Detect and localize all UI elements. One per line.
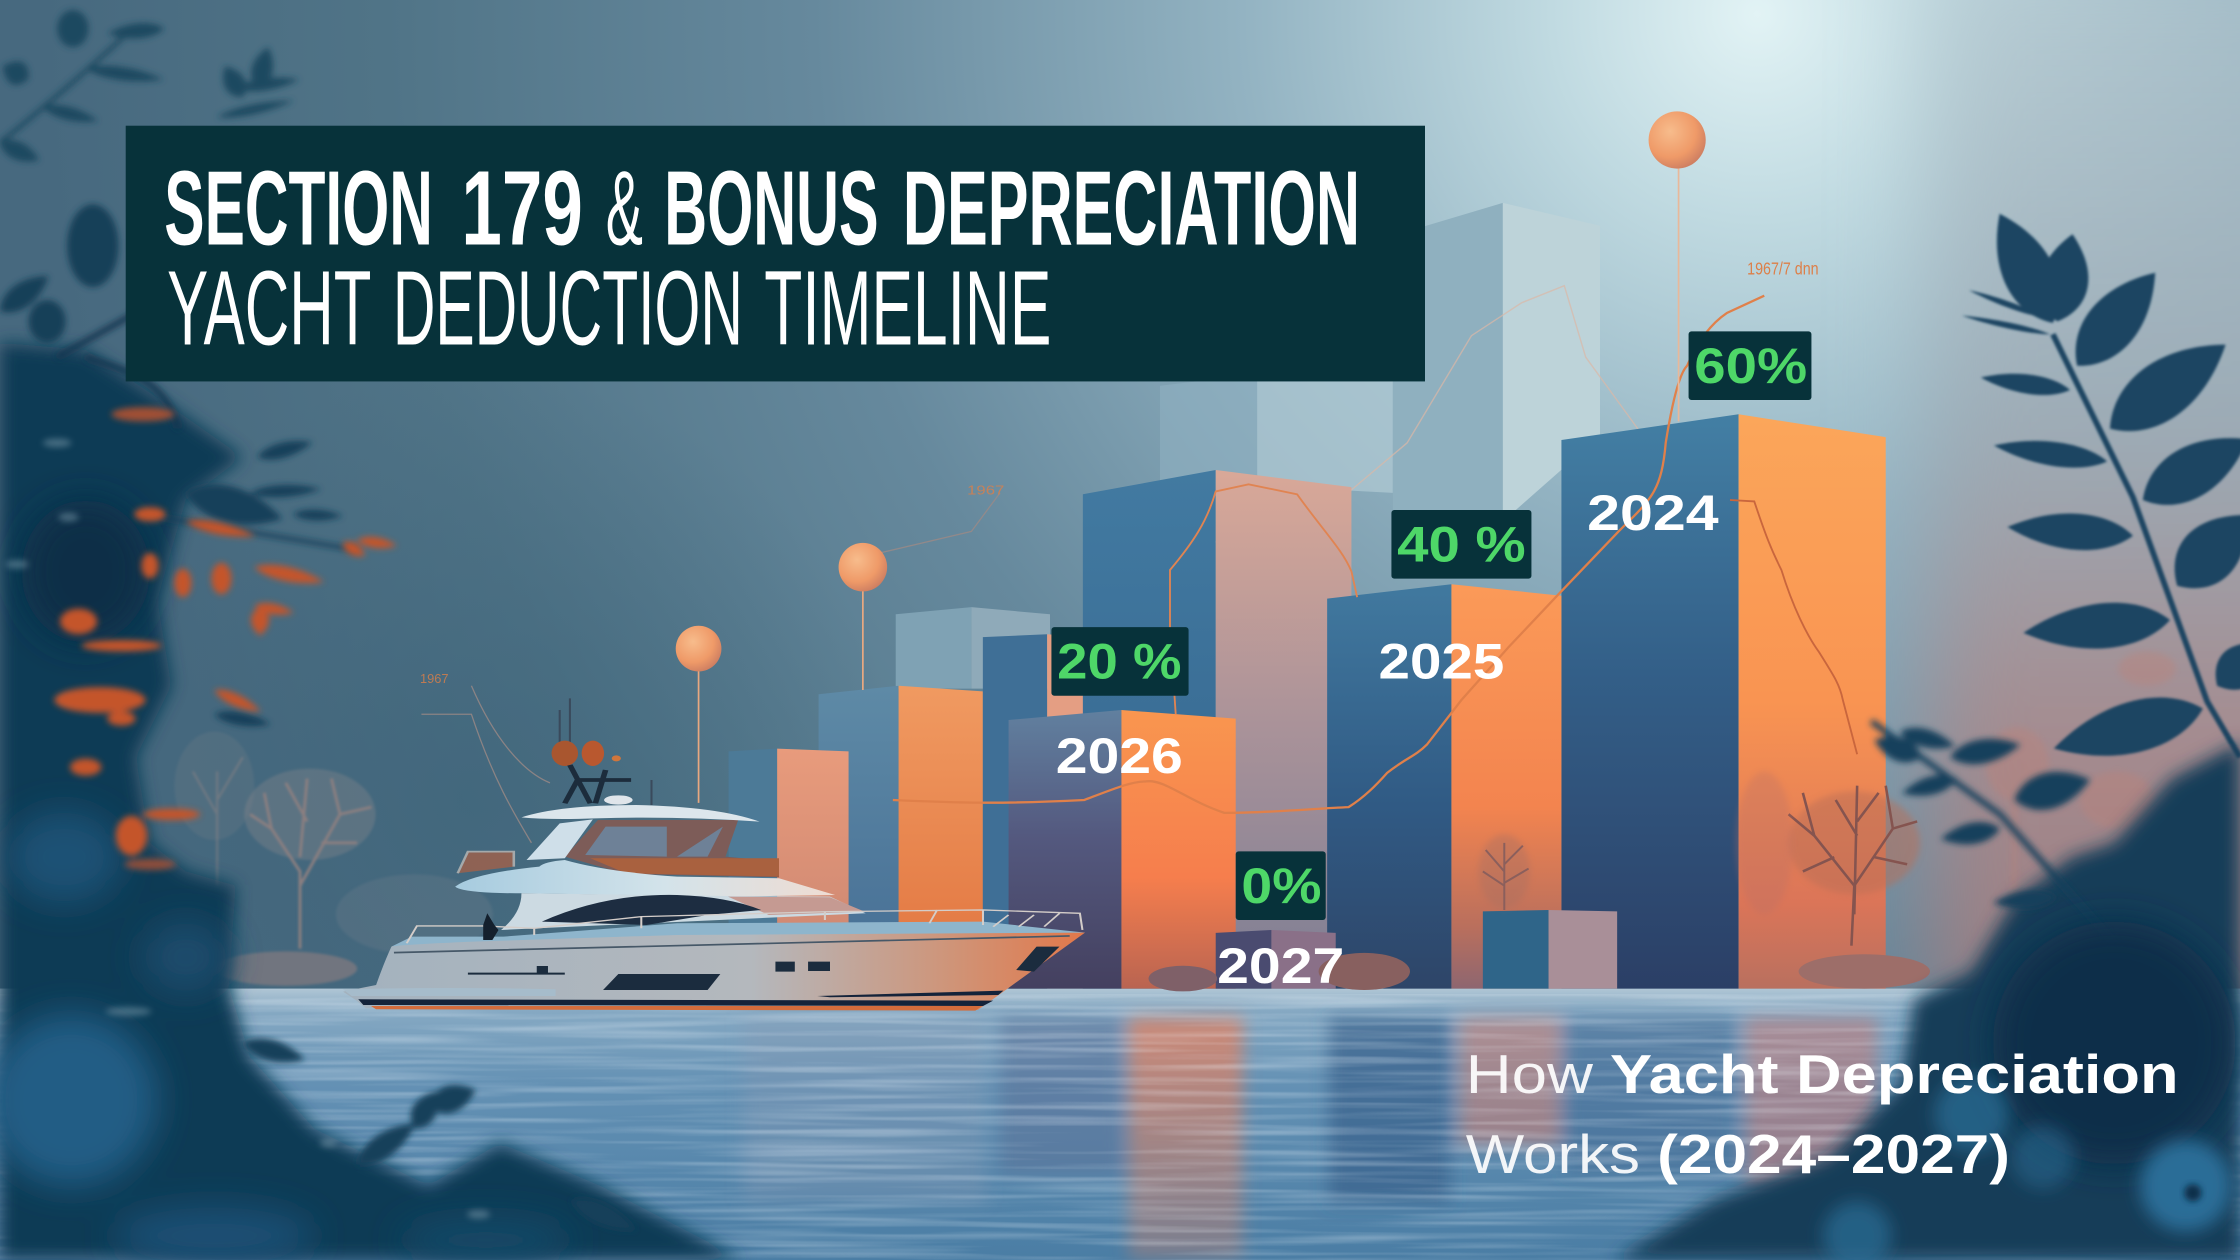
- small annotation labels: 1967: [420, 671, 449, 686]
- pale flecks in foliage: [6, 439, 490, 1219]
- bar: back-left tall: [819, 686, 983, 989]
- lower orange boot: [371, 1006, 982, 1011]
- title line 1: &: [606, 149, 643, 267]
- year: 2024: 2024: [1587, 485, 1719, 541]
- background right haze: [1929, 0, 2240, 1029]
- badge: 40 %: [1391, 510, 1531, 579]
- data line: back bar arc: [1170, 484, 1357, 714]
- year: 2027: 2027: [1217, 938, 1344, 994]
- crisp leaves with stem: [1961, 203, 2240, 773]
- leaves top-left: [0, 10, 300, 429]
- yacht: [343, 698, 1085, 1011]
- main cabin: [501, 893, 866, 930]
- title panel: [126, 126, 1425, 381]
- dark foliage mass: [0, 343, 743, 1260]
- aft rail: [458, 852, 514, 873]
- badge: 0%: 0%: [1241, 858, 1321, 914]
- small annotation labels: 1967: [967, 482, 1004, 497]
- bar: back-left small: [729, 749, 849, 989]
- badge: 20 %: 20 %: [1057, 634, 1181, 690]
- pale background towers: [896, 203, 1600, 689]
- subtitle line 1: [1466, 1044, 2179, 1105]
- cabin window: [542, 895, 761, 925]
- background dim left: [0, 343, 1000, 1000]
- water surface: [0, 989, 2240, 1260]
- small annotation labels: [420, 258, 1819, 686]
- lower dark foliage mass: [1614, 743, 2240, 1260]
- waterline stripe: [358, 991, 1003, 1006]
- side rail line: [394, 936, 1070, 953]
- bar: 2026: [1009, 710, 1236, 989]
- title line 2: DEDUCTION: [393, 249, 743, 367]
- background tree left: [174, 731, 493, 986]
- dark core: [1993, 921, 2236, 1164]
- year: 2026: 2026: [1056, 728, 1183, 784]
- mid deck: [455, 860, 835, 897]
- title line 1: DEPRECIATION: [903, 149, 1360, 267]
- hull body: [343, 933, 1085, 1010]
- water reflections: [743, 1017, 1877, 1260]
- subtitle line 2: [1466, 1124, 2010, 1185]
- rub rail: [343, 988, 556, 996]
- flower center: [2184, 1184, 2201, 1201]
- bar: 2024: [1561, 414, 1886, 989]
- water ripples: [0, 994, 2240, 1260]
- small cube next to 2025: [1483, 910, 1617, 989]
- blue lower foliage: [0, 500, 571, 1260]
- small line left: [421, 493, 1000, 843]
- faint pink background trees: [1986, 651, 2176, 929]
- hull windows: [468, 947, 1059, 990]
- data line: main orange curve: [893, 296, 1764, 813]
- title line 1: SECTION: [164, 149, 433, 267]
- subtitle line 2: Works: [1466, 1124, 1640, 1185]
- badge: 0%: [1236, 851, 1326, 920]
- main deck: [391, 922, 1085, 947]
- subtitle line 2: (2024–2027): [1657, 1124, 2010, 1185]
- thin pale data lines behind bars: [1171, 286, 1664, 571]
- crew figure: [483, 913, 499, 940]
- balloon left: [676, 626, 721, 803]
- trees and bushes around bars: [1149, 771, 1930, 991]
- bar: behind 2026 label: [983, 634, 1111, 989]
- year: 2025: 2025: [1379, 634, 1504, 690]
- title line 2: YACHT: [167, 249, 371, 367]
- badge: 20 %: [1051, 627, 1189, 696]
- flybridge glazing: [565, 820, 779, 877]
- bar: tall back center: [1083, 470, 1351, 989]
- mast and radar: [552, 698, 652, 805]
- bar: 2025: [1327, 584, 1561, 989]
- hardtop support: [527, 819, 593, 860]
- orange leaves: [54, 407, 398, 870]
- subtitle line 1: How: [1466, 1044, 1594, 1105]
- title line 1: 179: [461, 149, 583, 267]
- balloon top: [1649, 111, 1706, 421]
- blue flowers: [1823, 1077, 2231, 1260]
- badge: 40 %: 40 %: [1397, 516, 1526, 572]
- data line: 2024 bar descent: [1730, 500, 1857, 754]
- small annotation labels: 1967/7 dnn: [1747, 258, 1819, 278]
- subtitle line 1: Yacht Depreciation: [1610, 1044, 2179, 1105]
- balloon middle: [839, 543, 887, 690]
- hardtop: [521, 805, 760, 822]
- badge: 60%: 60%: [1694, 338, 1807, 394]
- badge: 60%: [1689, 331, 1811, 400]
- foliage leaf tips along lower edge: [240, 1033, 641, 1240]
- dark branch leaves reaching right: [143, 435, 357, 731]
- title line 2: TIMELINE: [764, 249, 1051, 367]
- title line 1: [164, 149, 1360, 267]
- subtitle: [1466, 1044, 2179, 1185]
- railings: [407, 910, 1082, 943]
- bar: 2027 small cube: [1216, 930, 1336, 989]
- branch with small leaves: [1870, 721, 2114, 943]
- right foliage: [1614, 203, 2240, 1260]
- title line 1: BONUS: [664, 149, 879, 267]
- left foliage: [0, 10, 743, 1260]
